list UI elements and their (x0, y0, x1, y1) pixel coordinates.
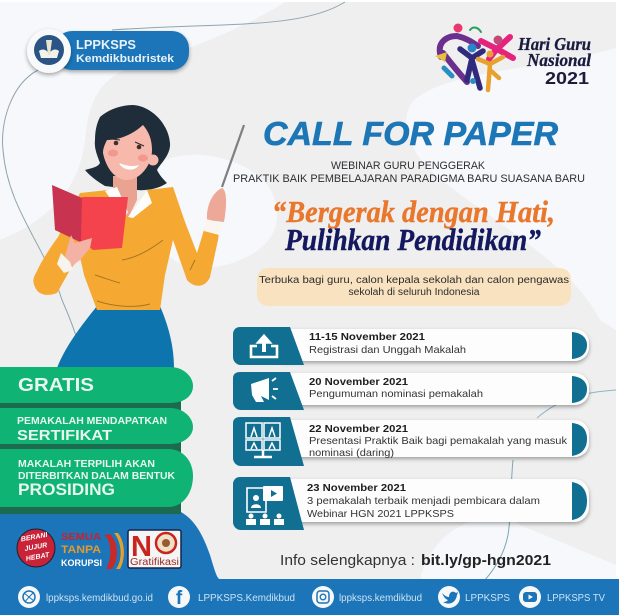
social: twitter (438, 586, 510, 608)
icon: upload (251, 335, 277, 357)
badge: Berani Jujur Hebat: HEBAT (25, 552, 51, 563)
timeline item 4: Webinar HGN 2021 LPPKSPS (307, 508, 454, 520)
badge: No Gratifikasi (128, 530, 181, 568)
icon: webinar audience (246, 486, 284, 525)
social: instagram (312, 586, 422, 608)
logo badge: LPPKSPS Kemdikbudristek (27, 29, 189, 73)
timeline item 1: 11-15 November 2021 (309, 331, 425, 343)
icon: video meeting (246, 423, 280, 457)
logo badge: LPPKSPS Kemdikbudristek: LPPKSPS (76, 38, 136, 52)
timeline item 3: nominasi (daring) (309, 447, 394, 459)
timeline item 4 (233, 477, 589, 530)
timeline item 3 (233, 417, 589, 466)
benefit: sertifikat (0, 408, 193, 444)
timeline item 1 (233, 327, 589, 365)
benefit: sertifikat: SERTIFIKAT (17, 428, 112, 444)
badge: Berani Jujur Hebat (17, 529, 55, 567)
title: CALL FOR PAPER (263, 115, 558, 152)
timeline item 3: 22 November 2021 (309, 423, 408, 435)
hair (85, 105, 170, 190)
audience callout: Terbuka bagi guru, calon kepala sekolah dan calon pengawas (259, 275, 569, 286)
footer social bar (18, 586, 605, 609)
timeline item 3: Presentasi Praktik Baik bagi pemakalah yang masuk (309, 435, 568, 447)
benefit: prosiding: PROSIDING (18, 480, 115, 499)
bottom blue panel (0, 512, 619, 615)
event logo: Hari Guru Nasional 2021: Hari Guru (517, 34, 591, 54)
more info link: Info selengkapnya : (280, 552, 415, 569)
subtitle: WEBINAR GURU PENGGERAK (331, 160, 485, 172)
benefit: sertifikat: PEMAKALAH MENDAPATKAN (17, 416, 167, 427)
benefit: gratis (0, 367, 193, 403)
social: website (18, 586, 153, 608)
icon: megaphone (251, 378, 278, 402)
collar (105, 187, 152, 218)
audience callout (257, 268, 571, 306)
social: twitter: LPPKSPS (465, 593, 510, 604)
timeline item 4: 3 pemakalah terbaik menjadi pembicara dalam (307, 495, 540, 507)
benefit: gratis: GRATIS (18, 374, 94, 395)
badge: Semua Tanpa Korupsi: SEMUA (61, 532, 101, 543)
badge: Semua Tanpa Korupsi (61, 532, 124, 569)
more info link: bit.ly/gp-hgn2021 (421, 552, 551, 569)
panel: benefits green (0, 367, 193, 514)
timeline item 1: Registrasi dan Unggah Makalah (309, 344, 466, 356)
skirt (57, 306, 174, 368)
timeline item 4: 23 November 2021 (307, 482, 406, 494)
timeline item 2: 20 November 2021 (309, 376, 408, 388)
badge: Semua Tanpa Korupsi: KORUPSI (61, 558, 102, 569)
social: facebook (168, 586, 295, 609)
slogan (272, 194, 555, 257)
social: facebook: f (176, 588, 183, 609)
badge: Berani Jujur Hebat: BERANI (20, 532, 49, 543)
red book (52, 185, 82, 243)
benefit: prosiding: MAKALAH TERPILIH AKAN (18, 459, 155, 470)
social: youtube (519, 586, 605, 608)
benefit: prosiding (0, 449, 193, 507)
neck (113, 176, 137, 218)
audience callout: sekolah di seluruh Indonesia (348, 287, 480, 298)
yellow sweater (33, 187, 220, 310)
badge: Semua Tanpa Korupsi: TANPA (61, 544, 101, 556)
slogan: Pulihkan Pendidikan” (284, 222, 541, 257)
badge: No Gratifikasi: N (131, 531, 152, 563)
social: website: lppksps.kemdikbud.go.id (46, 593, 153, 604)
badges (17, 529, 181, 569)
pointing hand and cuff (207, 188, 226, 222)
event logo: Hari Guru Nasional 2021 (435, 24, 591, 90)
badge: Berani Jujur Hebat: JUJUR (24, 542, 48, 553)
social: youtube: LPPKSPS TV (547, 593, 605, 604)
social: facebook: LPPKSPS.Kemdikbud (198, 593, 295, 604)
pointer stick (222, 125, 244, 187)
timeline item 2: Pengumuman nominasi pemakalah (309, 388, 483, 400)
holding hand (65, 235, 92, 266)
illustration: teacher (33, 105, 244, 368)
subtitle: PRAKTIK BAIK PEMBELAJARAN PARADIGMA BARU SUASANA BARU (233, 173, 585, 185)
subtitle (233, 160, 585, 185)
social: instagram: lppksps.kemdikbud (339, 593, 422, 604)
event logo: Hari Guru Nasional 2021: Nasional (526, 50, 591, 70)
timeline item 2 (233, 372, 589, 410)
badge: No Gratifikasi: Gratifikasi (130, 557, 179, 568)
logo badge: LPPKSPS Kemdikbudristek: Kemdikbudristek (76, 53, 175, 65)
event logo: Hari Guru Nasional 2021: 2021 (545, 68, 589, 88)
slogan: “Bergerak dengan Hati, (272, 194, 555, 229)
face (103, 125, 152, 180)
benefit: prosiding: DITERBITKAN DALAM BENTUK (18, 471, 176, 482)
more info link (280, 552, 551, 569)
